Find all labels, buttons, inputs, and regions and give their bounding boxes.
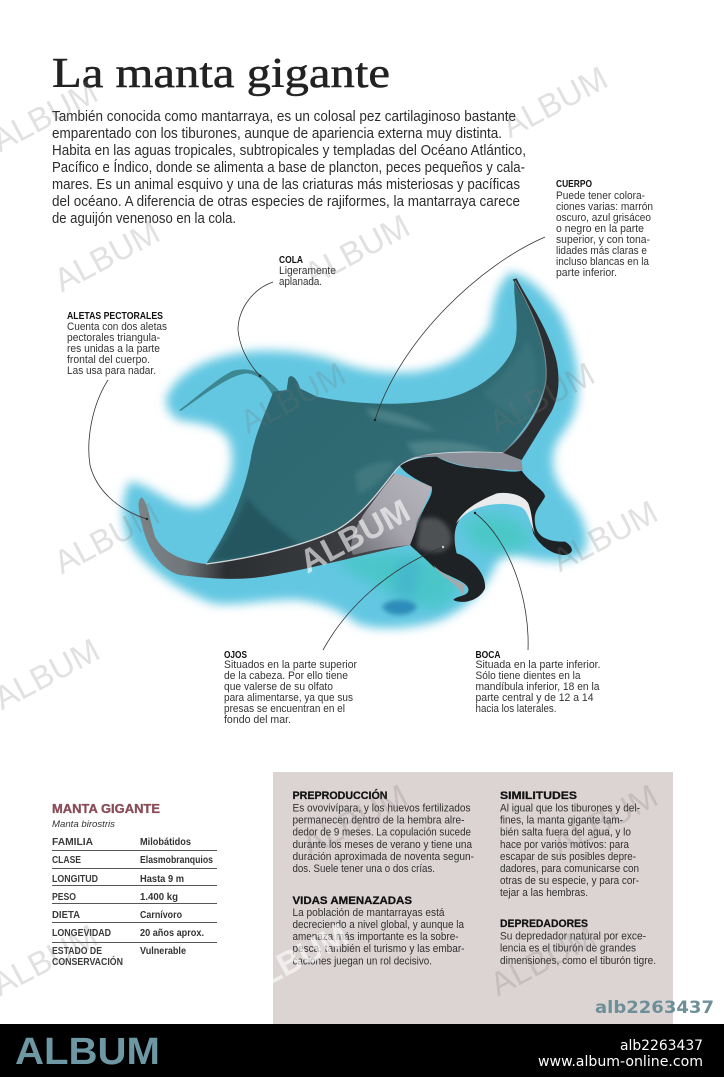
watermarks: ALBUM	[48, 213, 165, 299]
footer url: www.album-online.com	[538, 1054, 703, 1070]
section: depredadores: DEPREDADORES	[500, 918, 588, 930]
section: similitudes: escapar de sus posibles depre-	[500, 851, 636, 863]
upper body	[206, 279, 546, 564]
table rules and rows: LONGEVIDAD	[52, 928, 111, 939]
intro text block: emparentado con los tiburones, aunque de apariencia externa muy distinta.	[52, 125, 502, 142]
intro text block	[52, 108, 526, 227]
section: preproducción: durante los meses de verano y tiene una	[292, 839, 473, 851]
section: vidas amenazadas: amenaza más importante es la sobre-	[292, 931, 459, 943]
leader line: ojos	[323, 546, 444, 650]
species data table	[52, 802, 217, 968]
section: similitudes: SIMILITUDES	[500, 790, 577, 802]
grey chest patch	[351, 473, 432, 555]
section: vidas amenazadas: caciones juegan un rol decisivo.	[292, 956, 432, 968]
label: aletas pectorales: Cuenta con dos aletas	[67, 321, 167, 333]
section: similitudes: bién salta fuera del agua, y lo	[500, 826, 631, 838]
watermarks: ALBUM	[298, 207, 415, 293]
section: preproducción: Es ovovivípara, y los huevos fertilizados	[292, 802, 471, 814]
tail	[179, 369, 280, 411]
footer reference: alb2263437	[620, 1038, 703, 1054]
label: aletas pectorales: res unidas a la parte	[67, 343, 160, 355]
table rules and rows: DIETA	[52, 910, 80, 921]
label: cuerpo: o negro en la parte	[556, 223, 644, 235]
table rules and rows: ESTADO DE	[52, 946, 102, 957]
table rules and rows: CLASE	[52, 855, 81, 866]
section: depredadores: dimensiones, como el tiburón tigre.	[500, 955, 656, 967]
watermarks: ALBUM	[234, 355, 351, 441]
label: boca: BOCA	[476, 650, 500, 661]
image code: alb2263437	[595, 998, 714, 1018]
right wing rim	[502, 278, 559, 460]
table heading: MANTA GIGANTE	[52, 802, 160, 816]
lower lobe highlight	[433, 565, 465, 595]
label: cuerpo: superior, y con tona-	[556, 234, 650, 246]
watermarks: ALBUM	[296, 777, 413, 863]
section: vidas amenazadas: pesca, también el turismo y las embar-	[292, 943, 465, 955]
section: depredadores: lencia es el tiburón de grandes	[500, 942, 636, 954]
label: ojos: para alimentarse, ya que sus	[224, 692, 353, 704]
footer logo: ALBUM	[15, 1031, 160, 1073]
label: cuerpo: ciones varias: marrón	[556, 201, 653, 213]
watermarks: ALBUM	[496, 59, 613, 145]
section: similitudes	[500, 790, 640, 899]
table rules and rows: CONSERVACIÓN	[52, 955, 123, 968]
label: cuerpo	[556, 179, 653, 279]
table rules and rows: PESO	[52, 892, 76, 903]
leader line: cuerpo	[374, 237, 545, 421]
leader line: aletas	[89, 380, 148, 520]
section: preproducción: PREPRODUCCIÓN	[292, 789, 388, 802]
label: boca: Sólo tiene dientes en la	[476, 670, 581, 682]
grey band	[408, 452, 523, 471]
section: depredadores	[500, 918, 656, 967]
intro text block: de aguijón venenoso en la cola.	[52, 210, 236, 227]
label: ojos	[224, 650, 357, 726]
section: similitudes: fines, la manta gigante tam-	[500, 814, 623, 826]
label: cuerpo: parte inferior.	[556, 267, 617, 279]
black head and cephalic lobes	[400, 457, 572, 602]
label: cuerpo: oscuro, azul grisáceo	[556, 212, 651, 224]
label: ojos: de la cabeza. Por ello tiene	[224, 670, 348, 682]
watermarks: ALBUM	[483, 355, 600, 441]
label: ojos: OJOS	[224, 650, 247, 661]
leader line: boca	[474, 512, 528, 650]
label: aletas pectorales: Las usa para nadar.	[67, 365, 156, 377]
section: similitudes: tejar a las hembras.	[500, 887, 588, 899]
label: ojos: que valerse de su olfato	[224, 681, 333, 693]
section: vidas amenazadas	[292, 895, 465, 968]
label: aletas pectorales: frontal del cuerpo.	[67, 354, 150, 366]
watermarks: ALBUM	[546, 777, 663, 863]
label: aletas pectorales: pectorales triangula-	[67, 332, 160, 344]
table rules and rows: LONGITUD	[52, 874, 98, 885]
label: boca: parte central y de 12 a 14	[476, 692, 594, 704]
table rules and rows: Milobátidos	[140, 837, 191, 848]
table rules and rows	[52, 837, 217, 968]
panel: facts	[273, 772, 673, 1024]
table rules and rows: Vulnerable	[140, 946, 186, 957]
section: preproducción: dedor de 9 meses. La copulación sucede	[292, 826, 471, 838]
intro text block: del océano. A diferencia de otras especies de rajiformes, la mantarraya carece	[52, 193, 520, 210]
section: vidas amenazadas: decreciendo a nivel global, y aunque la	[292, 919, 465, 931]
label: boca: hacia los laterales.	[476, 703, 556, 715]
watermarks: ALBUM	[484, 917, 601, 1003]
section: preproducción	[292, 789, 474, 875]
section: similitudes: dadores, para comunicarse con	[500, 863, 639, 875]
watermarks: ALBUM	[546, 493, 663, 579]
table rules and rows: Carnívoro	[140, 910, 182, 921]
label: cuerpo: Puede tener colora-	[556, 190, 645, 202]
mouth underside	[456, 493, 537, 537]
label: boca	[476, 650, 600, 715]
section: vidas amenazadas: La población de mantarrayas está	[292, 907, 445, 919]
label: ojos: fondo del mar.	[224, 714, 291, 726]
intro text block: Habita en las aguas tropicales, subtropicales y templadas del Océano Atlántico,	[52, 142, 526, 159]
section: depredadores: Su depredador natural por exce-	[500, 930, 646, 942]
label: cola: COLA	[279, 255, 303, 266]
label: aletas pectorales	[67, 311, 167, 377]
label: cuerpo: incluso blancas en la	[556, 256, 649, 268]
section: similitudes: otras de su especie, y para cor-	[500, 875, 639, 887]
intro text block: mares. Es un animal esquivo y una de las criaturas más misteriosas y pacíficas	[52, 176, 520, 193]
watermarks: ALBUM	[231, 916, 354, 1004]
label: boca: Situada en la parte inferior.	[476, 659, 600, 671]
scientific name: Manta birostris	[52, 819, 115, 830]
title: La manta gigante	[52, 51, 390, 97]
section: similitudes: Al igual que los tiburones y del-	[500, 802, 640, 814]
label: cuerpo: lidades más claras e	[556, 245, 647, 257]
label: aletas pectorales: ALETAS PECTORALES	[67, 311, 163, 322]
label: cola: Ligeramente	[279, 265, 336, 277]
section: preproducción: dos. Suele tener una o dos crías.	[292, 863, 435, 875]
label: boca: mandíbula inferior, 18 en la	[476, 681, 600, 693]
label: cuerpo: CUERPO	[556, 179, 592, 190]
label: cola	[279, 255, 336, 288]
section: preproducción: permanecen dentro de la hembra alre-	[292, 814, 465, 826]
speckled grey area on head	[417, 517, 452, 552]
watercolor background	[123, 273, 587, 628]
label: ojos: Situados en la parte superior	[224, 659, 357, 671]
table rules and rows: FAMILIA	[52, 837, 93, 848]
watermarks: ALBUM	[48, 495, 165, 581]
leader line: cola	[238, 282, 273, 377]
table rules and rows: Elasmobranquios	[140, 855, 213, 866]
section: preproducción: duración aproximada de noventa segun-	[292, 851, 474, 863]
body highlights	[212, 340, 536, 560]
intro text block: Pacífico e Índico, donde se alimenta a base de plancton, peces pequeños y cala-	[52, 159, 525, 176]
footer bar	[0, 1024, 724, 1077]
label: ojos: presas se encuentran en el	[224, 703, 345, 715]
section: similitudes: hace por varios motivos: para	[500, 839, 630, 851]
lower stripe and left wing tip	[139, 473, 430, 579]
illustration: manta ray on watercolor	[123, 273, 587, 628]
table rules and rows: 20 años aprox.	[140, 928, 204, 939]
table rules and rows: Hasta 9 m	[140, 874, 184, 885]
label: cola: aplanada.	[279, 276, 322, 288]
watermarks: ALBUM	[293, 492, 416, 580]
table rules and rows: 1.400 kg	[140, 892, 178, 903]
intro text block: También conocida como mantarraya, es un colosal pez cartilaginoso bastante	[52, 108, 516, 125]
section: vidas amenazadas: VIDAS AMENAZADAS	[292, 895, 412, 907]
